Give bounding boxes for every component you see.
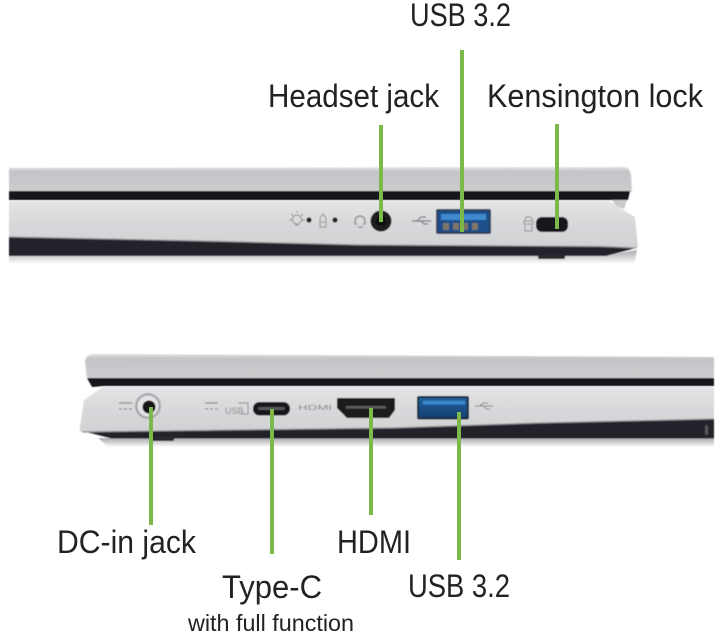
icon: headset: [355, 216, 365, 227]
port: USB 3.2: [436, 209, 491, 234]
base edge highlight: [82, 419, 714, 432]
laptop base: [9, 201, 638, 248]
underside: [9, 237, 636, 256]
port: Kensington lock: [536, 217, 568, 232]
line: DC-in jack: [149, 407, 153, 525]
laptop lid: [85, 354, 714, 378]
icon: USB symbol: [475, 403, 493, 409]
hole: [705, 425, 708, 435]
label: Type-C: Type-C: [222, 569, 322, 605]
label: Kensington lock: Kensington lock: [487, 78, 704, 114]
port: HDMI: [337, 398, 395, 418]
laptop lid: [9, 167, 632, 192]
indicator icons: [289, 211, 338, 227]
label: Headset jack: Headset jack: [268, 78, 440, 114]
port: headset jack: [370, 210, 392, 232]
rubber foot: [538, 255, 565, 259]
rubber foot: [150, 437, 174, 441]
power label: [119, 403, 132, 409]
panel: top laptop side view: [9, 167, 638, 264]
line: top USB 3.2: [460, 50, 464, 232]
panel: bottom laptop side view: [80, 354, 714, 447]
line: bottom USB 3.2: [457, 412, 461, 560]
underside: [82, 418, 714, 438]
callout lines: [149, 50, 559, 560]
icon: USB symbol: [412, 217, 431, 224]
line: HDMI: [369, 408, 373, 515]
laptop base: [80, 387, 714, 432]
port: Type-C: [253, 402, 290, 416]
laptop shadow: [98, 438, 714, 447]
icon: lock: [524, 217, 533, 231]
base edge highlight: [9, 237, 636, 248]
line: headset jack: [379, 125, 383, 222]
HDMI label: HDMI: [298, 405, 332, 412]
label: DC-in jack: DC-in jack: [57, 524, 197, 560]
port: DC-in jack: [135, 393, 161, 419]
laptop shadow: [9, 250, 637, 264]
port: USB 3.2: [417, 396, 469, 420]
Type-C icons: [205, 403, 248, 416]
label: HDMI: HDMI: [337, 524, 411, 560]
line: Kensington lock: [555, 124, 559, 229]
line: Type-C: [270, 409, 274, 554]
label: bottom USB 3.2: USB 3.2: [408, 568, 510, 604]
hinge sliver: [612, 200, 627, 209]
hinge gap: [87, 378, 714, 387]
hinge gap: [9, 191, 630, 200]
Type-C icons: USB: [225, 406, 244, 416]
